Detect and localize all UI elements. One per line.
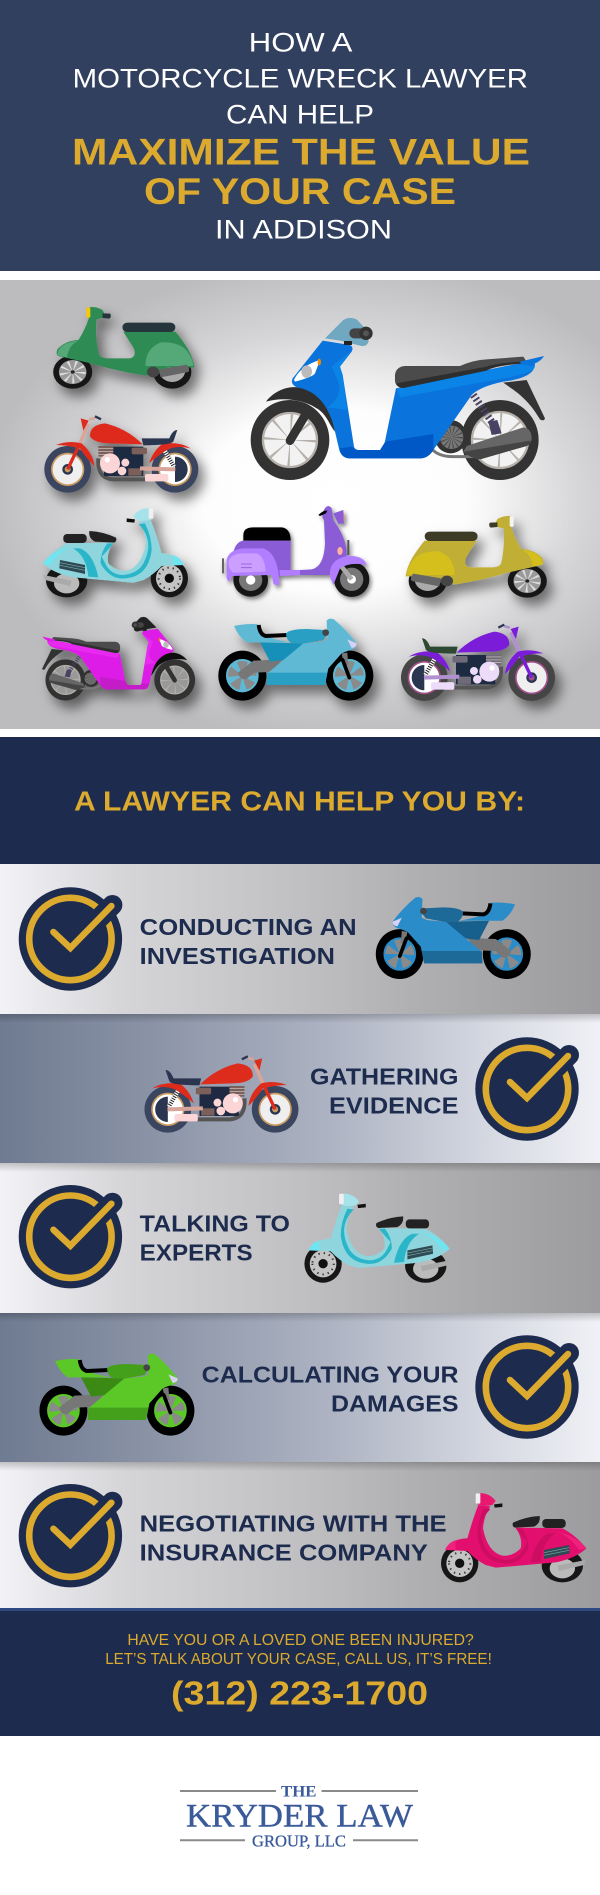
icon: cyan scooter [304, 1194, 450, 1283]
text: EXPERTS [140, 1240, 253, 1266]
title: highlighted lines: OF YOUR CASE [144, 171, 456, 212]
panel: motorcycle showcase [0, 280, 600, 729]
text: INSURANCE COMPANY [140, 1540, 428, 1566]
icon: red cruiser [44, 416, 198, 493]
panel: talking to experts [0, 1163, 600, 1313]
icon: red cruiser [144, 1056, 298, 1133]
panel: gathering evidence [0, 1014, 600, 1163]
title: intro lines: CAN HELP [226, 100, 374, 130]
call to action text: LET’S TALK ABOUT YOUR CASE, CALL US, IT’S FREE! [105, 1651, 492, 1668]
text: INVESTIGATION [140, 943, 335, 969]
icon: purple cruiser [401, 625, 555, 701]
panel: conducting an investigation [0, 864, 600, 1014]
icon: blue sport bike [376, 897, 531, 979]
panel: call to action footer [0, 1608, 600, 1736]
icon: check badge [475, 1335, 579, 1439]
phone number: (312) 223-1700 [171, 1674, 428, 1711]
icon: check badge [475, 1037, 579, 1141]
text [202, 1362, 459, 1417]
panel: negotiating with the insurance company [0, 1462, 600, 1608]
icon: large blue scooter [251, 318, 545, 480]
text [140, 914, 357, 969]
text: TALKING TO [140, 1211, 290, 1237]
logo: The Kryder Law Group: THE [281, 1784, 316, 1801]
icon: check badge [19, 1185, 122, 1288]
title: intro lines: HOW A [249, 28, 352, 58]
text [310, 1063, 458, 1118]
logo: The Kryder Law Group: GROUP, LLC [252, 1832, 346, 1851]
title: location: IN ADDISON [215, 215, 392, 245]
logo: The Kryder Law Group [180, 1784, 418, 1851]
logo: The Kryder Law Group: KRYDER LAW [186, 1799, 414, 1835]
icon: pink scooter [441, 1493, 586, 1582]
text: GATHERING [310, 1063, 458, 1089]
panel: calculating your damages [0, 1313, 600, 1462]
call to action text [105, 1632, 492, 1668]
icon: check badge [19, 887, 122, 991]
icon: green scooter [53, 307, 194, 389]
icon: cyan scooter [43, 508, 188, 597]
title: highlighted lines: MAXIMIZE THE VALUE [72, 132, 530, 173]
icon: teal sport bike [218, 619, 373, 701]
text: CALCULATING YOUR [202, 1362, 459, 1388]
heading: A LAWYER CAN HELP YOU BY: [74, 786, 525, 817]
icon: check badge [19, 1484, 122, 1587]
text: DAMAGES [331, 1391, 458, 1417]
icon: yellow scooter [406, 516, 547, 598]
text: CONDUCTING AN [140, 914, 357, 940]
title: intro lines [73, 28, 528, 130]
text [140, 1511, 447, 1566]
icon: green sport bike [39, 1354, 194, 1436]
text: EVIDENCE [329, 1092, 458, 1118]
text: NEGOTIATING WITH THE [140, 1511, 447, 1537]
panel: lawyer heading band [0, 737, 600, 864]
header panel [0, 0, 600, 271]
icon: magenta scooter [42, 617, 195, 701]
title: highlighted lines [72, 132, 530, 212]
call to action text: HAVE YOU OR A LOVED ONE BEEN INJURED? [127, 1632, 474, 1649]
text [140, 1211, 290, 1266]
icon: purple scooter [222, 506, 369, 597]
title: intro lines: MOTORCYCLE WRECK LAWYER [73, 64, 528, 94]
